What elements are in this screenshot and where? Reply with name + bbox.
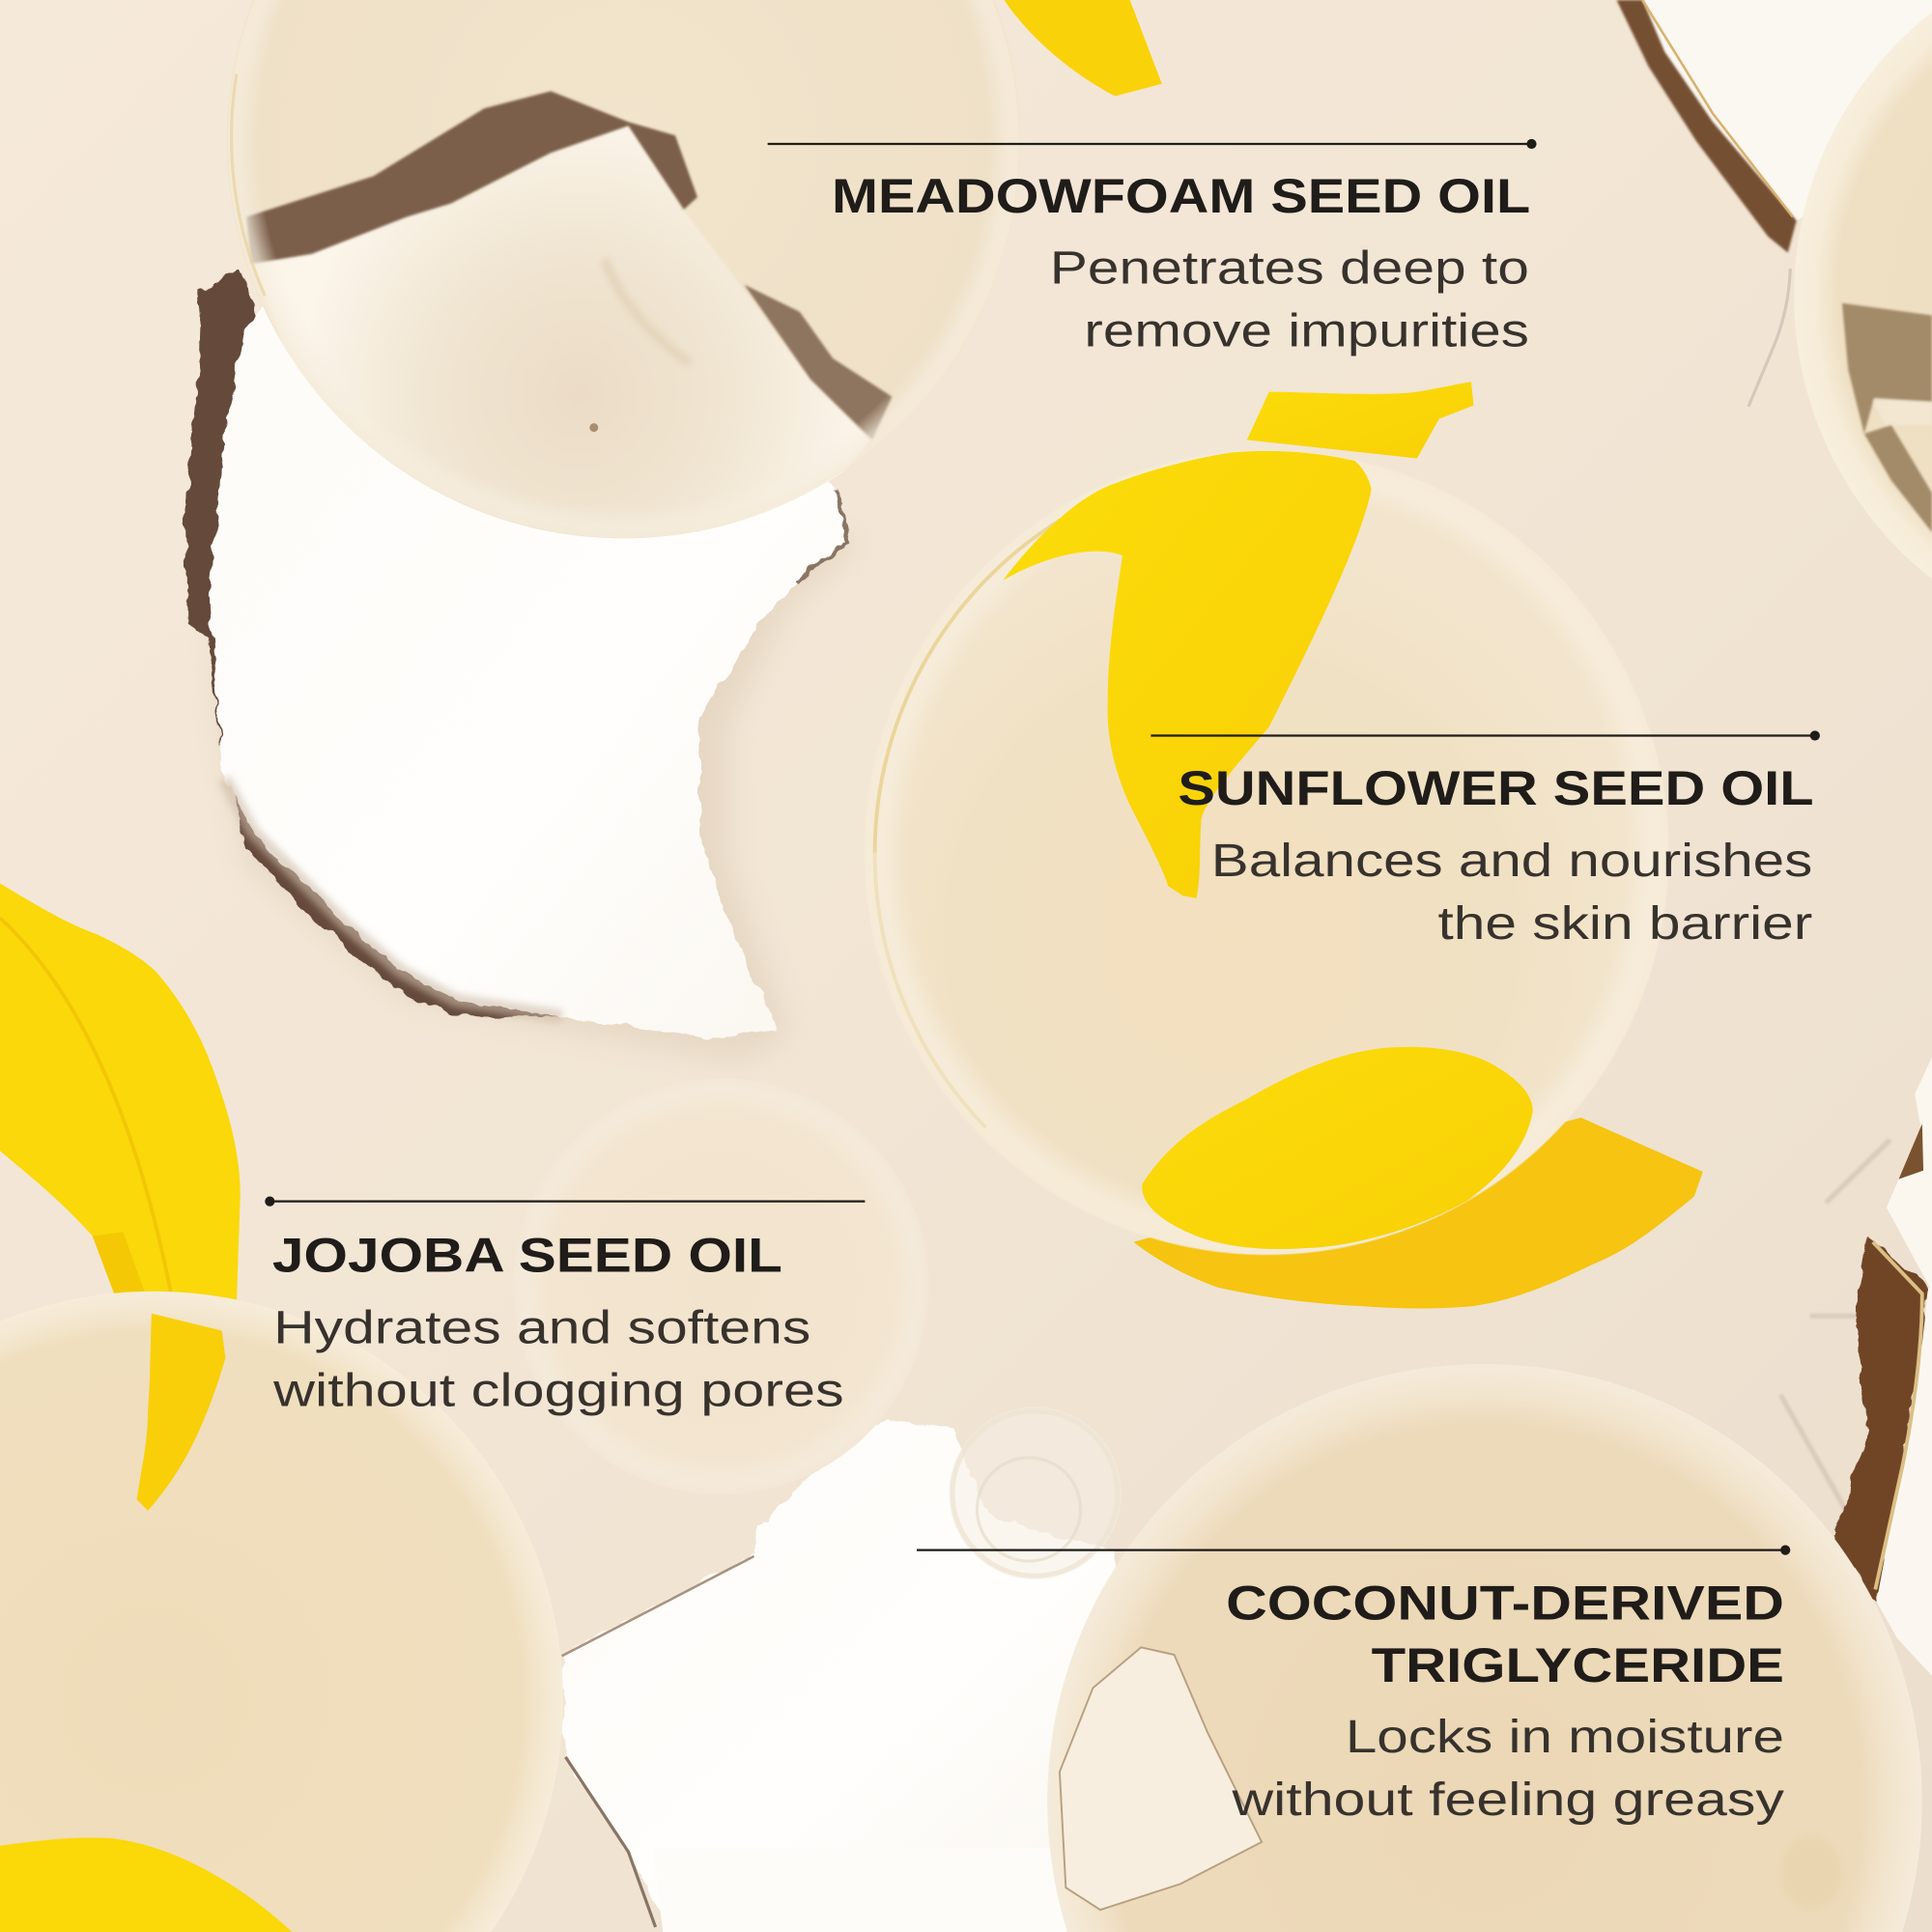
petals seen through drop bbox=[0, 1314, 292, 1932]
leader line bbox=[917, 1545, 1790, 1555]
oil drop: bottom left bbox=[0, 1292, 563, 1932]
description bbox=[1231, 1711, 1785, 1826]
coconut: right edge piece bbox=[1780, 1057, 1932, 1676]
description: Penetrates deep to bbox=[1050, 242, 1529, 294]
oil drop: bottom right bbox=[1047, 1364, 1922, 1932]
coconut seen through drop bbox=[1060, 1647, 1842, 1910]
heading: COCONUT-DERIVED bbox=[1226, 1577, 1784, 1631]
callout: jojoba seed oil bbox=[265, 1197, 865, 1416]
heading: SUNFLOWER SEED OIL bbox=[1178, 761, 1814, 815]
oil drop: sunflower bbox=[864, 446, 1669, 1256]
petal: behind sunflower lens, top bbox=[1247, 382, 1474, 458]
description: Hydrates and softens bbox=[273, 1301, 810, 1353]
heading: JOJOBA SEED OIL bbox=[272, 1228, 782, 1282]
oil drop: jojoba bbox=[513, 1078, 929, 1494]
coconut: top right piece bbox=[1616, 0, 1932, 407]
description: Balances and nourishes bbox=[1211, 835, 1812, 887]
description bbox=[1211, 835, 1812, 950]
heading: MEADOWFOAM SEED OIL bbox=[832, 169, 1530, 223]
leader line bbox=[265, 1197, 865, 1207]
description bbox=[272, 1301, 844, 1416]
callout: sunflower seed oil bbox=[1151, 730, 1820, 950]
callout: coconut-derived triglyceride bbox=[917, 1545, 1790, 1826]
callout: meadowfoam seed oil bbox=[768, 139, 1537, 356]
leader line bbox=[768, 139, 1537, 149]
oil drop: top bbox=[227, 0, 1020, 554]
description: Locks in moisture bbox=[1346, 1711, 1784, 1763]
petals seen through drop bbox=[1003, 446, 1533, 1249]
description: without clogging pores bbox=[272, 1364, 844, 1416]
drop rim bbox=[227, 0, 1020, 538]
description bbox=[1050, 242, 1529, 356]
oil drop: small bbox=[949, 1407, 1122, 1579]
description: the skin barrier bbox=[1438, 897, 1812, 950]
description: remove impurities bbox=[1084, 304, 1529, 356]
heading: TRIGLYCERIDE bbox=[1372, 1638, 1784, 1692]
coconut: bottom piece bbox=[562, 1418, 1117, 1932]
coconut seen through drop bbox=[1842, 303, 1932, 532]
leader line bbox=[1151, 730, 1820, 741]
petal: behind sunflower lens, bottom bbox=[1133, 1118, 1703, 1308]
drop rim bbox=[864, 450, 1669, 1256]
description: without feeling greasy bbox=[1231, 1774, 1785, 1826]
coconut seen through drop bbox=[246, 91, 892, 554]
oil drop: top right bbox=[1794, 13, 1932, 579]
heading bbox=[1226, 1577, 1784, 1692]
petal: top bbox=[1005, 0, 1162, 96]
petal: left bbox=[0, 884, 241, 1303]
coconut: large piece bbox=[185, 246, 863, 1060]
